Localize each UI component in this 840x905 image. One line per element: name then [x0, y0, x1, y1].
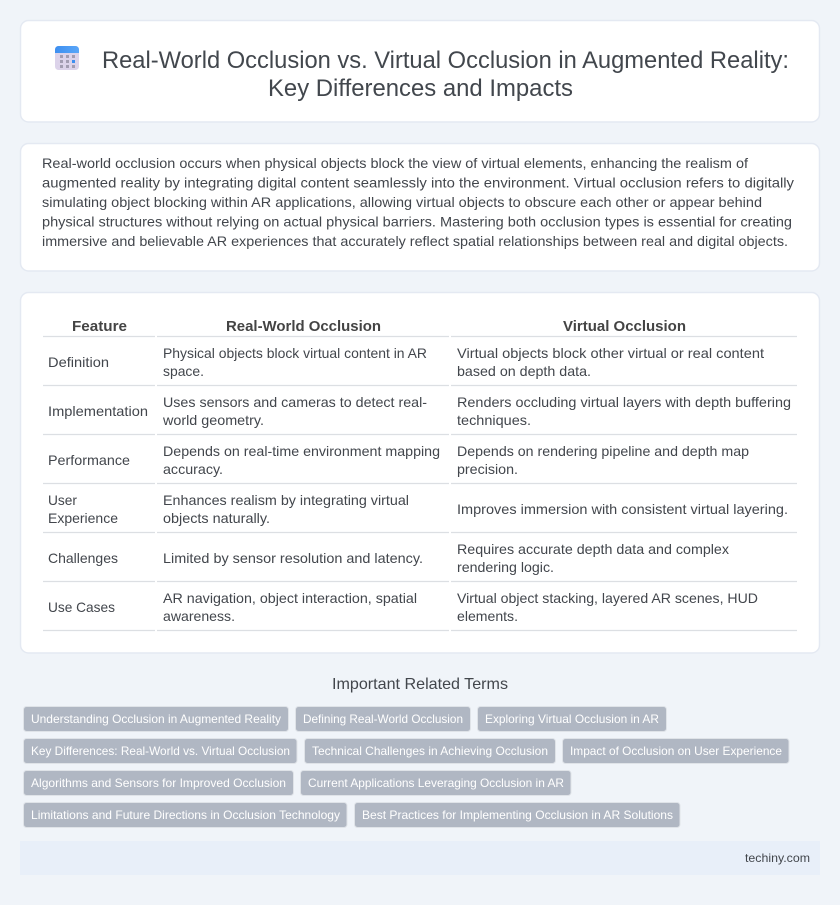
table row: challenges	[48, 541, 729, 575]
panel: comparison table	[20, 292, 820, 653]
text block: introduction paragraph: augmented reality by integrating digital content seamlessly into the environment. Virtual occlusion refers to digitally	[42, 174, 794, 190]
tag: Key Differences: Real-World vs. Virtual Occlusion	[31, 744, 290, 758]
table row: implementation: world geometry.	[162, 412, 264, 428]
tag: Current Applications Leveraging Occlusion in AR	[308, 776, 564, 790]
tag: Best Practices for Implementing Occlusion in AR Solutions	[362, 808, 673, 822]
table row: user experience	[48, 492, 788, 526]
table row: performance: accuracy.	[163, 461, 223, 477]
table row: implementation: techniques.	[457, 412, 531, 428]
tag	[478, 706, 666, 732]
panel: title header	[20, 20, 820, 122]
tag	[304, 738, 556, 764]
table row: implementation: Implementation	[48, 403, 148, 419]
tag: Algorithms and Sensors for Improved Occlusion	[31, 776, 286, 790]
table row: definition: Definition	[48, 354, 109, 370]
table row: use cases	[48, 590, 758, 624]
table row: challenges: Requires accurate depth data and complex	[457, 541, 729, 557]
tag: Understanding Occlusion in Augmented Reality	[31, 712, 281, 726]
tag	[300, 770, 571, 796]
footer: techiny.com	[745, 851, 810, 865]
table row: performance: Depends on real-time environment mapping	[163, 443, 440, 459]
table row: implementation: Uses sensors and cameras to detect real-	[163, 394, 427, 410]
table header	[72, 319, 686, 335]
title: Real-World Occlusion vs. Virtual Occlusion in Augmented Reality:	[102, 47, 789, 74]
table row: user experience: Experience	[48, 510, 118, 526]
tag: Impact of Occlusion on User Experience	[570, 744, 782, 758]
table row: use cases: Use Cases	[48, 599, 115, 615]
footer	[20, 841, 820, 875]
tag	[354, 802, 680, 828]
table row: performance	[48, 443, 749, 477]
table row: definition: based on depth data.	[457, 363, 591, 379]
table row: challenges: rendering logic.	[457, 559, 554, 575]
panel: related term tags	[24, 706, 789, 828]
text block: introduction paragraph: Real-world occlusion occurs when physical objects block the view of virtual elements, enhancing the realism of	[42, 155, 748, 171]
table row: implementation	[48, 394, 791, 428]
icon: calendar	[55, 46, 79, 70]
title: Key Differences and Impacts	[268, 75, 573, 102]
tag: Exploring Virtual Occlusion in AR	[485, 712, 659, 726]
tag: Technical Challenges in Achieving Occlusion	[312, 744, 548, 758]
table row: user experience: Improves immersion with consistent virtual layering.	[457, 501, 788, 517]
tag	[24, 802, 347, 828]
tag: Limitations and Future Directions in Occlusion Technology	[31, 808, 340, 822]
table row: use cases: Virtual object stacking, layered AR scenes, HUD	[457, 590, 758, 606]
table row: performance: Depends on rendering pipeline and depth map	[457, 443, 749, 459]
table row: implementation: Renders occluding virtual layers with depth buffering	[457, 394, 791, 410]
tag	[296, 706, 470, 732]
table row: use cases: AR navigation, object interaction, spatial	[163, 590, 417, 606]
table row: challenges: Challenges	[48, 550, 118, 566]
table row: user experience: objects naturally.	[163, 510, 270, 526]
table header: Feature	[72, 319, 127, 335]
table row: definition: Physical objects block virtual content in AR	[163, 345, 427, 361]
text block: introduction paragraph: simulating object blocking within AR applications, allowing virtual objects to obscure each other or appear behind	[42, 194, 762, 210]
tag	[562, 738, 789, 764]
table header: Real-World Occlusion	[226, 319, 381, 335]
text block: introduction paragraph: physical structures without relying on actual physical barriers. Mastering both occlusion types is essential for creating	[42, 214, 792, 230]
table header: Virtual Occlusion	[563, 319, 686, 335]
tag	[24, 770, 294, 796]
table row: user experience: User	[48, 492, 77, 508]
text block: introduction paragraph: immersive and believable AR experiences that accurately reflect spatial relationships between real and digital objects.	[42, 233, 788, 249]
table row: performance: precision.	[457, 461, 518, 477]
heading: important related terms: Important Related Terms	[332, 676, 508, 693]
table row: user experience: Enhances realism by integrating virtual	[163, 492, 409, 508]
title	[102, 47, 789, 102]
tag	[24, 738, 297, 764]
panel: introduction	[20, 144, 820, 271]
table row: definition	[48, 345, 764, 379]
tag: Defining Real-World Occlusion	[303, 712, 463, 726]
table row: use cases: elements.	[457, 608, 518, 624]
text block: introduction paragraph	[42, 155, 794, 249]
table row: definition: space.	[163, 363, 204, 379]
table row: definition: Virtual objects block other virtual or real content	[457, 345, 764, 361]
table row: use cases: awareness.	[163, 608, 235, 624]
tag	[24, 706, 288, 732]
table row: performance: Performance	[48, 452, 130, 468]
table row: challenges: Limited by sensor resolution and latency.	[163, 550, 423, 566]
